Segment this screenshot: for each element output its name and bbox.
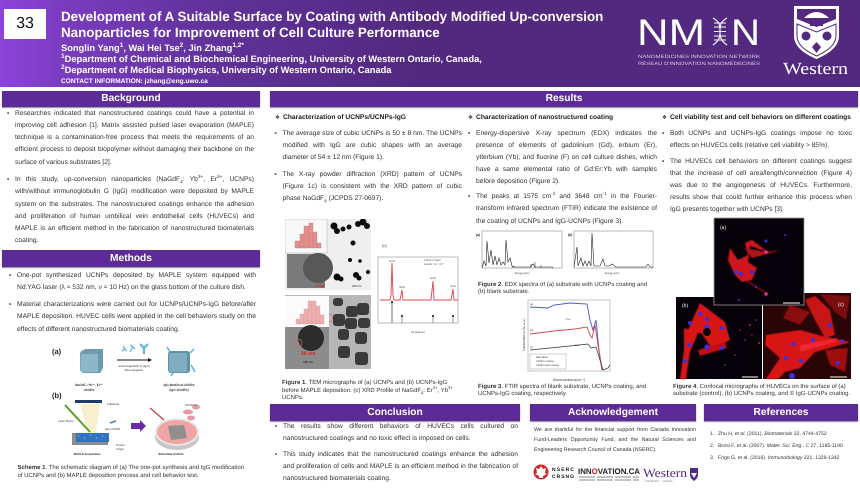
column 2 text: [468, 130, 657, 225]
caption: scheme 1: [18, 464, 244, 479]
panel: background: ▪: [7, 176, 9, 183]
diagram: scheme 1: NaGdF₄:Yb³⁺, Er³⁺: [75, 383, 103, 387]
reference list: 3.: [710, 455, 714, 461]
caption: figure 4: substrate (control), (b) UCNPs coating, and © IgG-UCNPs coating.: [673, 391, 850, 397]
caption: figure 3: Figure 3. FTIR spectra of blank substrate, UCNPs coating, and: [478, 384, 646, 390]
micrograph a: [714, 218, 804, 305]
figure 3: FTIR spectra: (c): [530, 346, 533, 349]
caption: figure 4: [673, 384, 850, 397]
heading: acknowledgement: [530, 404, 696, 421]
methods text: One-pot synthesized UCNPs deposited by MAPLE system equipped with: [17, 272, 256, 279]
antibodies: [122, 344, 148, 354]
figure 2: EDX spectra: (b): [568, 233, 572, 237]
caption: figure 4: Figure 4. Confocal micrographs of HUVECs on the surface of (a): [673, 384, 846, 390]
heading: acknowledgement: Acknowledgement: [568, 407, 658, 418]
figure 3: FTIR spectra: Wavenumbers(cm⁻¹): [553, 378, 585, 382]
diagram: scheme 1: UCNPs: [84, 388, 95, 392]
title: [61, 8, 603, 40]
header banner: [0, 0, 860, 87]
panel: conclusion: [270, 404, 520, 482]
cell culture dish: Substrate Culture: [158, 452, 184, 456]
diagram: scheme 1: (b): [52, 391, 62, 400]
heading: conclusion: [270, 404, 520, 421]
column 1 text: phase NaGdF4 (JCPDS 27-0697).: [282, 195, 383, 204]
column 2 text: before deposition (Figure 2).: [476, 178, 560, 185]
MAPLE deposition: Target: [116, 447, 124, 451]
XRD chart c: (c): [382, 243, 387, 248]
column 2 text: Energy-dispersive X-ray spectrum (EDX) indicates the: [476, 130, 657, 136]
background text: system on the substrates. The nanostructured coatings enhance the adhesion: [15, 201, 254, 208]
funder logos: NSERC: [552, 467, 574, 473]
reaction arrow: [117, 359, 150, 361]
panel: results column 1: ▪: [274, 130, 277, 136]
panel: results column 1: [274, 114, 462, 401]
acknowledgement text: We are thankful for the financial support from Canada Innovation: [534, 427, 696, 433]
funder logos: INNOVATION.CA: [578, 467, 640, 476]
background text: with/without immunoglobulin G (IgG) modification were deposited by MAPLE: [15, 188, 254, 195]
panel: results column 3: ▪: [662, 158, 664, 165]
XRD chart c: (220): [430, 277, 436, 280]
column 3 text: was due to the angiogenesis of HUVECs. Furthermore,: [670, 182, 852, 189]
poster number box: [4, 9, 46, 39]
background text: and proliferation of human umbilical vein endothelial cells (HUVECs) and: [15, 213, 254, 220]
funder logos: CRSNG: [552, 474, 574, 480]
column 1 text: The average size of cubic UCNPs is 50 ± 8 nm. The UCNPs: [282, 130, 462, 136]
acknowledgement text: Fund-Leaders Opportunity Fund, and the Natural Sciences and: [534, 437, 696, 443]
heading: references: [704, 404, 858, 421]
diagram: scheme 1: [52, 343, 200, 456]
subheading: ❖: [275, 114, 280, 120]
background text: improving cell adhesion [1]. Matrix assisted pulsed laser evaporation (MAPLE): [15, 122, 254, 129]
heading: conclusion: Conclusion: [367, 407, 423, 418]
panel: methods: ▪: [9, 301, 11, 308]
subheading: ❖: [468, 114, 473, 120]
XRD chart c: (311): [450, 285, 456, 288]
heading: background: Background: [101, 93, 161, 104]
TEM micrograph b: 500 nm: [303, 360, 314, 364]
panel: results column 3: [662, 114, 852, 397]
reference list: [710, 431, 843, 461]
panel: results column 2: ▪: [468, 193, 470, 200]
conclusion text: This study indicates that the nanostructured coatings enhance the adhesion: [283, 451, 518, 458]
background text: technique is a contamination-free process that meets the requirements of an: [15, 134, 254, 141]
figure 3: FTIR spectra: NH₂: [575, 344, 580, 347]
methods text: effects of different nanostructured biomaterials coating.: [17, 326, 180, 333]
acknowledgement text: [534, 427, 696, 453]
diagram: scheme 1: (IgG-UCNPs): [169, 388, 189, 392]
caption: figure 1: UCNPs.: [282, 395, 304, 401]
heading: methods: Methods: [110, 253, 152, 264]
column 1 text: modified with IgG are cubic shapes with an average: [282, 142, 462, 149]
logo: NMIN: RÉSEAU D'INNOVATION NANOMÉDECINES: [638, 60, 760, 66]
column 2 text: transform infrared spectrum (FTIR) indicate the existence of: [476, 205, 657, 212]
column 2 text: presence of elements of gadolinium (Gd), erbium (Er),: [476, 142, 657, 149]
figure 3: FTIR spectra: -CH₂: [565, 318, 571, 321]
column 1 text: (Figure 1c) is consistent with the XRD pattern of cubic: [282, 183, 462, 190]
cell culture dish: HUVECs: [185, 403, 198, 407]
figure 2: EDX spectra: Energy (keV): [515, 272, 529, 275]
column 3 text: The HUVECs cell behaviors on different coatings suggest: [670, 158, 852, 165]
authors: Songlin Yang1, Wai Hei Tse2, Jin Zhang1,2*: [61, 41, 244, 52]
background text: Researches indicated that nanostructured coatings could have a potential in: [15, 110, 254, 117]
heading: background: [2, 91, 260, 107]
subheading: ❖: [662, 114, 667, 120]
micrograph c: [763, 293, 851, 379]
XRD chart c: 2θ (degree): [411, 331, 425, 334]
title: Development of A Suitable Surface by Coating with Antibody Modified Up-conversion: [61, 8, 603, 24]
micrograph b: [676, 297, 762, 379]
TEM micrograph b: 20 nm: [301, 351, 316, 357]
figure 3: FTIR spectra: [522, 300, 610, 382]
conclusion text: [275, 423, 518, 482]
panel: references: [704, 404, 858, 461]
column 3 text: effects on HUVECs cells (relative cell viability > 85%).: [670, 142, 829, 149]
caption: scheme 1: Scheme 1. The schematic diagram of (a) The one-pot synthesis and IgG modification: [18, 465, 244, 471]
poster number box: 33: [16, 15, 34, 32]
background text: coating.: [15, 237, 38, 244]
conclusion text: and proliferation of cells and MAPLE is an efficient method in the fabrication of: [283, 463, 518, 470]
logo: Western: Western: [783, 59, 849, 78]
logo: Western: [783, 6, 849, 78]
reference list: Bicisi F, et al. (2007). Mater. Sci. Eng., C 27, 1185-1190: [718, 443, 843, 449]
funder logos: [534, 464, 698, 483]
funder logos: Western: [643, 466, 688, 480]
caption: figure 3: [478, 384, 646, 397]
funder logos: UNIVERSITY · CANADA: [645, 480, 673, 483]
figure 3: FTIR spectra: (a): [530, 303, 533, 306]
TEM micrograph b: [285, 295, 371, 369]
column 3 text: [662, 130, 852, 213]
caption: scheme 1: of UCNPs and (b) MAPLE deposition process and cell behavior test.: [18, 473, 199, 479]
micrograph b: (b): [682, 303, 688, 309]
XRD chart c: (200): [399, 286, 405, 289]
figure 3: FTIR spectra: UCNPs coating: [536, 360, 554, 363]
methods text: Nd:YAG laser (λ = 532 nm, ν = 10 Hz) on the glass bottom of the culture dish.: [17, 284, 246, 291]
conclusion text: nanostructured coatings and no toxic effect is imposed on cells.: [283, 435, 471, 442]
TEM micrograph a: 5 nm: [316, 284, 324, 288]
subheading: Characterization of nanostructured coating: [476, 114, 613, 120]
MAPLE deposition: Substrate: [107, 402, 120, 406]
cube before modification: [80, 349, 103, 373]
figure 1: [285, 219, 458, 369]
TEM micrograph a: [285, 218, 371, 290]
panel: methods: ▪: [9, 272, 11, 279]
caption: figure 2: (b) blank substrate.: [478, 289, 529, 295]
column 3 text: Both UCNPs and UCNPs-IgG coatings impose no toxic: [670, 130, 852, 136]
caption: figure 2: [478, 282, 647, 295]
figure 2: EDX spectra: [476, 230, 654, 275]
panel: methods: [2, 250, 260, 479]
heading: references: References: [754, 407, 808, 418]
MAPLE deposition: MAPLE Deposition: [74, 452, 101, 456]
process arrow: [131, 420, 146, 432]
panel: acknowledgement: [530, 404, 698, 483]
conclusion text: nanostructured biomaterials coating.: [283, 475, 391, 482]
figure 4: confocal micrographs: [676, 218, 851, 380]
TEM micrograph a: 500 nm: [352, 284, 362, 288]
conclusion text: The results show different behaviors of HUVECs cells cultured on: [283, 423, 518, 430]
panel: results column 2: [468, 114, 657, 397]
MAPLE deposition: [58, 400, 125, 456]
column 1 text: [274, 130, 462, 204]
caption: figure 1: Figure 1. TEM micrographs of (a) UCNPs and (b) UCNPs-IgG: [282, 380, 447, 386]
figure 3: FTIR spectra: (b): [530, 329, 533, 332]
panel: conclusion: ▪: [275, 423, 277, 430]
methods text: [9, 272, 256, 333]
diagram: scheme 1: Immunoglobulin G (IgG): [119, 364, 149, 368]
diagram: scheme 1: (a): [52, 347, 62, 356]
background text: surface of various substrates [2].: [15, 159, 112, 166]
subheading: Characterization of UCNPs/UCNPs-IgG: [283, 114, 406, 120]
affiliations: [61, 52, 482, 75]
caption: figure 1: before MAPLE deposition. (c) XRD Profile of NaGdF4: Er3+ , Yb3+: [282, 385, 453, 395]
XRD chart c: [378, 243, 458, 334]
heading: results: Results: [546, 93, 582, 104]
column 3 text: that the increase of cell area/length/connection (Figure 4): [670, 170, 852, 177]
figure 2: EDX spectra: Energy (keV): [605, 272, 619, 275]
logo: NMIN: NANOMEDICINES INNOVATION NETWORK: [638, 54, 761, 59]
heading: results: [270, 91, 858, 107]
acknowledgement text: Engineering Research Council of Canada (NSERC).: [534, 447, 656, 453]
panel: conclusion: ▪: [275, 451, 277, 458]
caption: figure 1: [282, 380, 453, 401]
MAPLE deposition: Frozen: [116, 443, 125, 447]
title: Nanoparticles for Improvement of Cell Culture Performance: [61, 24, 440, 40]
cell culture dish: [150, 403, 200, 456]
cube after modification: [167, 347, 195, 376]
panel: background: [2, 91, 260, 244]
affiliations: 2Department of Medical Biophysics, University of Western Ontario, Canada: [61, 64, 391, 75]
column 1 text: diameter of 54 ± 12 nm (Figure 1).: [282, 154, 384, 161]
figure 3: FTIR spectra: Transmittance (%, a.u.): [522, 318, 526, 352]
panel: results column 3: ▪: [662, 130, 664, 136]
reference list: Frigo G, et al. (2016). Immunobiology 221, 1329-1342: [718, 455, 839, 461]
diagram: scheme 1: Bioconjugated: [125, 368, 144, 372]
diagram: scheme 1: IgG Modified UCNPs: [164, 383, 195, 387]
XRD chart c: JCPDS 27-0697: [424, 259, 441, 262]
figure 3: FTIR spectra: Bare glass: [536, 356, 549, 359]
column 3 text: IgG presents together with UCNPs [3].: [670, 206, 784, 213]
logo: NMIN: [637, 14, 761, 66]
reference list: 1.: [710, 431, 714, 437]
affiliations: 1Department of Chemical and Biochemical Engineering, University of Western Ontario, Canada,: [61, 52, 482, 64]
background text: efficient process to deposit biopolymer without damaging their backbone on the: [15, 146, 254, 153]
column 3 text: results show that could further enhance this process when: [670, 194, 852, 201]
subheading: Cell viability test and cell behaviors on different coatings: [670, 114, 851, 120]
XRD chart c: NaGdF₄: Yb³⁺, Er³⁺: [424, 263, 445, 266]
column 1 text: The X-ray powder diffraction (XRD) pattern of UCNPs: [282, 171, 462, 178]
panel: results column 2: ▪: [468, 130, 470, 136]
figure 2: EDX spectra: (a): [476, 233, 480, 237]
caption: figure 3: UCNPs-IgG coating, respectively.: [478, 391, 567, 397]
panel: results column 1: ▪: [274, 171, 277, 178]
micrograph c: (c): [838, 302, 844, 308]
column 2 text: the coating of UCNPs and IgG-UCNPs (Figure 3).: [476, 218, 623, 225]
column 2 text: The peaks at 1575 cm-1 and 3648 cm-1 in the Fourier-: [476, 191, 657, 200]
micrograph a: (a): [720, 225, 726, 231]
column 2 text: have a same elemental ratio of Gd:Er:Yb with samples: [476, 166, 657, 173]
contact information: CONTACT INFORMATION: jzhang@eng.uwo.ca: [61, 78, 208, 84]
background text: MAPLE is an efficient method in the fabrication of nanostructured biomaterials: [15, 225, 254, 232]
MAPLE deposition: Laser Beam: [58, 419, 74, 423]
XRD chart c: (111): [389, 260, 395, 263]
methods text: Material characterizations were carried out for UCNPs/UCNPs-IgG before/after: [17, 301, 256, 308]
column 2 text: ytterbium (Yb), and fluorine (F) on cell culture dishes, which: [476, 154, 657, 161]
background text: In this study, up-conversion nanoparticles (NaGdF4: Yb3+, Er3+, UCNPs): [15, 174, 254, 185]
MAPLE deposition: IgG-UCNPs: [105, 427, 121, 431]
methods text: MAPLE deposition. HUVEC cells were applied in the cell behaviors study on the: [17, 313, 256, 320]
panel: background: ▪: [7, 110, 9, 117]
reference list: Zhu H, et al. (2011). Biomaterials 32, 4744-4752: [718, 431, 827, 437]
background text: [7, 110, 254, 244]
reference list: 2.: [710, 443, 714, 449]
figure 3: FTIR spectra: UCNPs-IgG coating: [536, 364, 559, 367]
heading: methods: [2, 250, 260, 267]
caption: figure 2: Figure 2. EDX spectra of (a) substrate with UCNPs coating and: [478, 282, 647, 288]
